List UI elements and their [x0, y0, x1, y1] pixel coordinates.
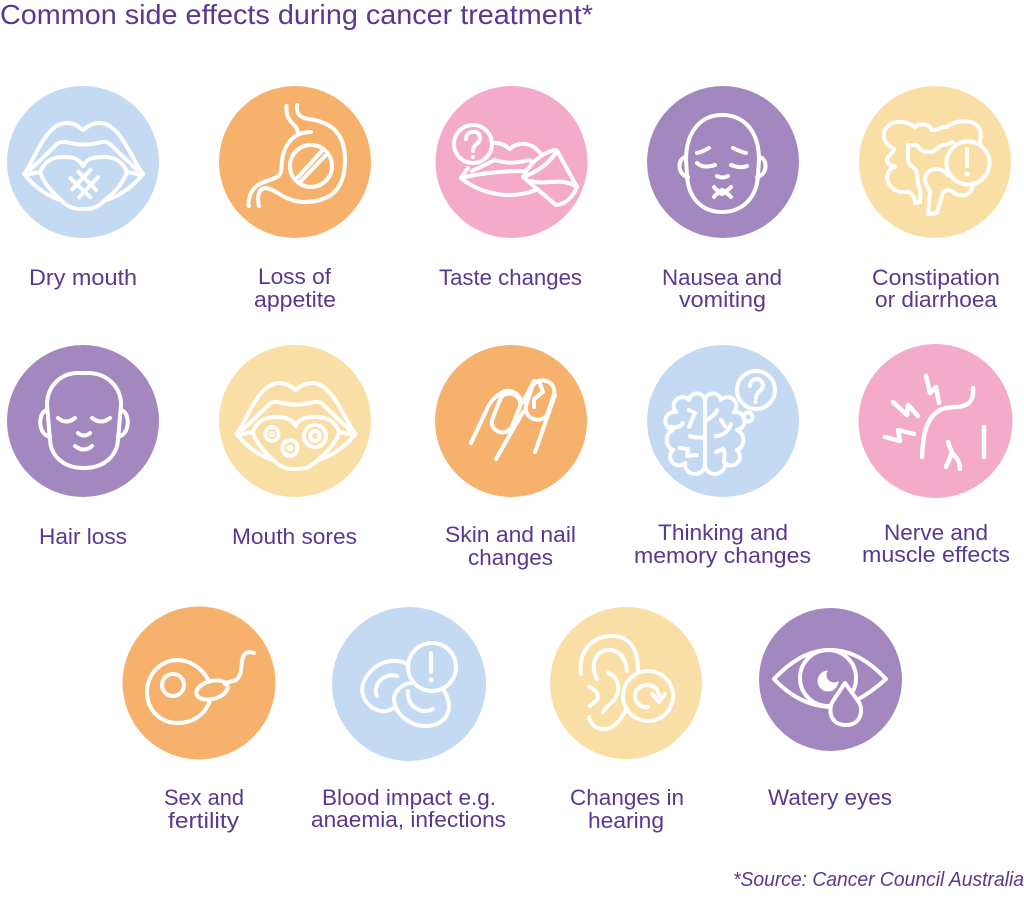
icon: dry mouth [24, 123, 143, 209]
panel: nerve and muscle effects [858, 344, 1012, 567]
label [445, 522, 576, 570]
icon: mouth with sores [236, 383, 356, 469]
icon: ear with sound [581, 636, 673, 729]
icon: intestines [884, 121, 990, 214]
panel: nausea and vomiting [647, 86, 799, 312]
icon: eye with tear [774, 650, 886, 725]
label: Changes in [570, 785, 684, 810]
label: Constipation [872, 265, 1000, 290]
label: hearing [588, 808, 664, 833]
label: or diarrhoea [875, 287, 998, 312]
label: Watery eyes [768, 785, 892, 810]
icon: nerves and lightning [885, 376, 984, 469]
label [872, 265, 1000, 312]
panel: constipation or diarrhoea [859, 86, 1011, 312]
label [634, 520, 811, 568]
panel: taste changes [436, 86, 588, 290]
label: Taste changes [439, 265, 582, 290]
panel: hair loss [7, 345, 159, 549]
label: Skin and nail [445, 522, 576, 547]
label: Mouth sores [232, 524, 357, 549]
label: Loss of [258, 264, 332, 289]
icon: nauseous face [679, 115, 766, 212]
panel: changes in hearing [550, 607, 702, 833]
panel: blood impact [311, 607, 506, 832]
label [311, 785, 506, 832]
label: Hair loss [39, 524, 127, 549]
panel: mouth sores [219, 345, 371, 549]
label: Thinking and [658, 520, 788, 545]
icon: lips and question mark [454, 125, 577, 205]
panel: dry mouth [7, 86, 159, 290]
label: Dry mouth [29, 265, 137, 290]
panel: loss of appetite [219, 86, 371, 312]
label: appetite [254, 287, 336, 312]
label: muscle effects [862, 542, 1010, 567]
label [862, 520, 1010, 567]
icon: egg and sperm [147, 652, 254, 723]
icon: brain and question [665, 371, 775, 474]
panel: skin and nail changes [435, 345, 587, 570]
panel: watery eyes [759, 608, 902, 810]
panel: sex and fertility [122, 606, 276, 833]
label: Nausea and [662, 265, 782, 290]
label [570, 785, 684, 833]
icon: blood cells and alert [362, 643, 456, 726]
label: fertility [168, 808, 239, 833]
label: Sex and [164, 785, 244, 810]
label: anaemia, infections [311, 807, 506, 832]
panel: thinking and memory changes [634, 345, 811, 568]
label: Nerve and [884, 520, 988, 545]
label [254, 264, 336, 312]
label [662, 265, 782, 312]
label [164, 785, 244, 833]
label: changes [468, 545, 553, 570]
icon: stomach [248, 105, 345, 206]
icon: bald head [40, 373, 128, 468]
label: Blood impact e.g. [322, 785, 496, 810]
label: memory changes [634, 543, 811, 568]
label: vomiting [679, 287, 766, 312]
icon: fingers and nails [471, 377, 557, 459]
